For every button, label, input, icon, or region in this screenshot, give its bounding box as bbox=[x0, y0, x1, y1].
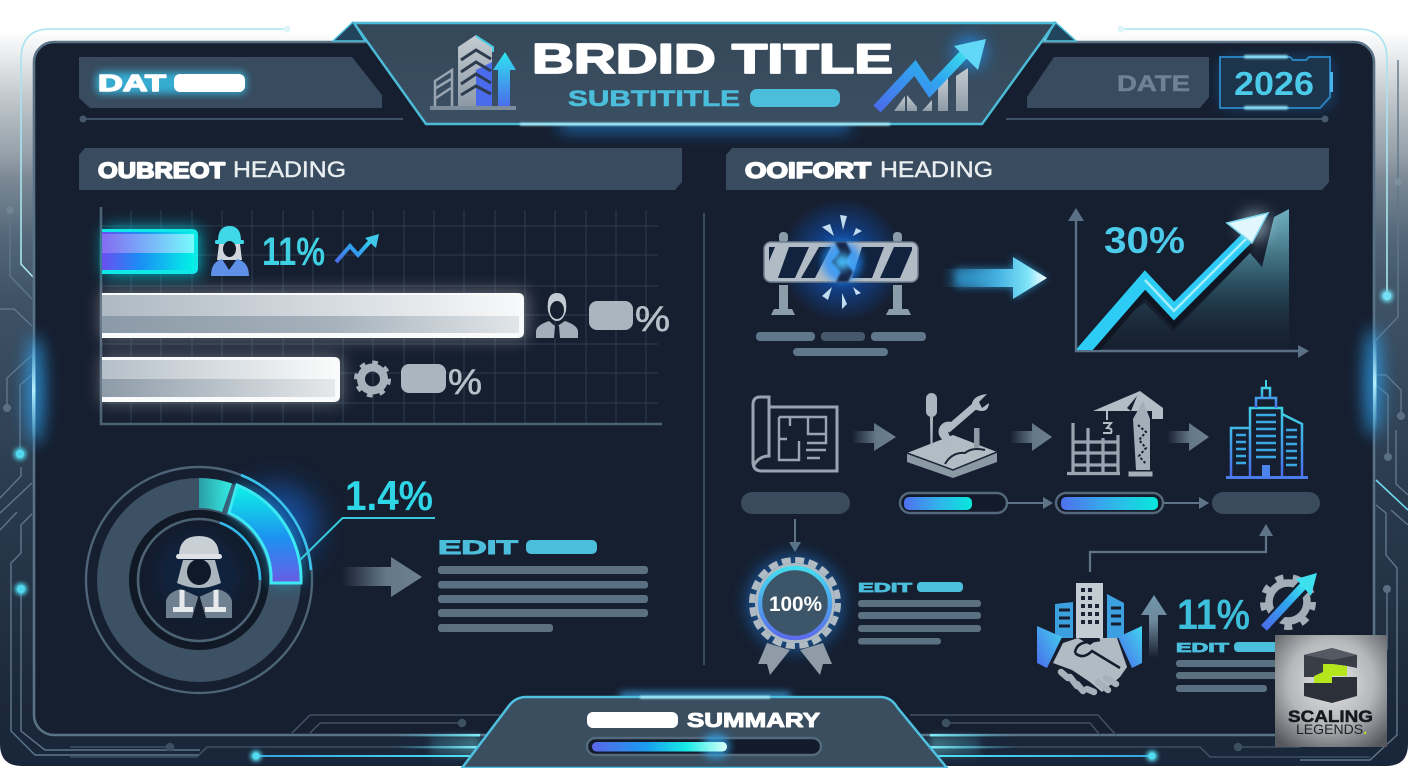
value: 11 percent: 11% bbox=[1177, 591, 1250, 639]
title panel bbox=[333, 22, 1076, 130]
growth chart bbox=[1068, 208, 1309, 370]
icon: tools on foundation bbox=[907, 393, 997, 478]
arrow bbox=[1010, 423, 1052, 451]
icon: building under crane bbox=[1067, 391, 1163, 476]
connector: partnership to final step bbox=[1090, 524, 1273, 572]
tab corners bbox=[333, 22, 1076, 41]
top right date tag bbox=[1006, 55, 1333, 122]
circuit glow lines: bottom bbox=[250, 734, 1158, 762]
logo mark bbox=[1304, 648, 1357, 703]
top left tag bbox=[79, 57, 403, 122]
donut base bbox=[113, 494, 285, 666]
date rule bbox=[1006, 116, 1328, 122]
heading bar left: OUBREOT bbox=[98, 158, 226, 183]
icon: building with up arrow bbox=[430, 35, 516, 110]
circuit traces: right side bbox=[1300, 60, 1408, 760]
growth line bbox=[1072, 212, 1269, 370]
arrow: donut to text bbox=[342, 557, 422, 597]
summary text: SUMMARY bbox=[687, 710, 821, 732]
step pill one bbox=[741, 492, 850, 514]
donut segment two bbox=[229, 485, 301, 583]
shards bbox=[822, 215, 862, 309]
icon: small trend arrow bbox=[336, 234, 379, 262]
chart axes bbox=[101, 207, 662, 424]
badge: 100 percent bbox=[747, 555, 843, 675]
year box: 2026 bbox=[1234, 65, 1314, 102]
text block: partnership description bbox=[1176, 640, 1280, 692]
text block: partnership description: EDIT bbox=[1176, 640, 1229, 655]
tag text: DAT bbox=[98, 70, 166, 96]
process flow bbox=[741, 380, 1320, 552]
icon: rising arrow with bars bbox=[877, 36, 986, 111]
arrow bbox=[852, 423, 896, 451]
tag pill bbox=[174, 74, 245, 92]
bar chart bbox=[100, 207, 670, 424]
logo bbox=[1275, 635, 1387, 747]
heading bar left bbox=[79, 148, 682, 190]
heading bar right bbox=[726, 148, 1329, 190]
summary progress bar bbox=[587, 733, 821, 759]
badge: 100 percent: 100% bbox=[769, 593, 822, 616]
growth value: 30% bbox=[1104, 220, 1185, 261]
text block: badge description: EDIT bbox=[858, 580, 912, 595]
heading bar left: HEADING bbox=[233, 157, 346, 182]
logo text: SCALING bbox=[1288, 707, 1373, 726]
summary pill bbox=[587, 712, 678, 728]
caption lines under barrier bbox=[756, 332, 926, 356]
outer ring bbox=[86, 467, 312, 693]
text block: donut description bbox=[438, 538, 648, 632]
circuit traces: bottom bbox=[70, 715, 1370, 757]
percent sign: % bbox=[635, 300, 670, 339]
logo: LEGENDS. bbox=[1296, 721, 1367, 737]
subtitle pill bbox=[750, 89, 840, 107]
donut chart bbox=[86, 467, 318, 693]
arrow down to badge bbox=[789, 519, 801, 552]
circuit traces: left side bbox=[0, 206, 200, 755]
icon: female worker bbox=[211, 226, 249, 276]
heading bar right: OOIFORT bbox=[745, 158, 872, 183]
percent sign: % bbox=[448, 363, 482, 402]
callout: 1.4 percent: 1.4% bbox=[345, 472, 433, 519]
title text: BRDID TITLE bbox=[532, 35, 893, 82]
heading bar right: HEADING bbox=[880, 157, 993, 182]
outer thin cyan line bbox=[21, 26, 1408, 510]
badge scallop bbox=[755, 563, 835, 643]
side glows bbox=[14, 290, 1393, 595]
value pill bbox=[401, 364, 446, 393]
step pill two bbox=[900, 493, 1007, 513]
arrow: barrier to growth bbox=[941, 257, 1047, 299]
icon: broken barrier bbox=[764, 198, 918, 322]
icon: businessman bbox=[536, 293, 578, 338]
callout: 1.4 percent bbox=[300, 472, 435, 560]
connector bbox=[1164, 497, 1209, 509]
value: 11 percent: 11% bbox=[262, 230, 325, 274]
chart grid bbox=[102, 210, 658, 423]
arrow bbox=[1167, 423, 1209, 451]
tag rule bbox=[80, 116, 403, 122]
date label: DATE bbox=[1117, 71, 1190, 96]
column divider bbox=[703, 213, 705, 665]
text block: donut description: EDIT bbox=[438, 538, 519, 559]
text block: badge description bbox=[858, 580, 981, 644]
icon: blueprint bbox=[753, 397, 837, 471]
icon: gear bbox=[356, 363, 388, 395]
year box bbox=[1220, 55, 1333, 110]
icon: handshake with buildings bbox=[1037, 583, 1142, 692]
connector bbox=[1007, 497, 1053, 509]
subtitle: SUBTITITLE bbox=[568, 86, 740, 111]
value pill bbox=[589, 301, 633, 330]
bar: gear bbox=[100, 354, 343, 404]
arrow up bbox=[1141, 595, 1167, 658]
icon: worker with vest bbox=[166, 536, 232, 618]
growth axes bbox=[1068, 208, 1309, 358]
tag glow bbox=[96, 72, 246, 94]
step pill three bbox=[1056, 493, 1163, 513]
donut segment one bbox=[199, 478, 232, 512]
area under growth line bbox=[1076, 209, 1289, 350]
icon: finished tower bbox=[1226, 380, 1308, 478]
bar: female worker bbox=[102, 228, 200, 276]
bar: male bbox=[100, 290, 528, 340]
step pill four bbox=[1212, 492, 1320, 514]
icon: gear with arrow bbox=[1263, 573, 1317, 630]
ribbons bbox=[758, 643, 832, 675]
summary panel bbox=[462, 693, 947, 768]
